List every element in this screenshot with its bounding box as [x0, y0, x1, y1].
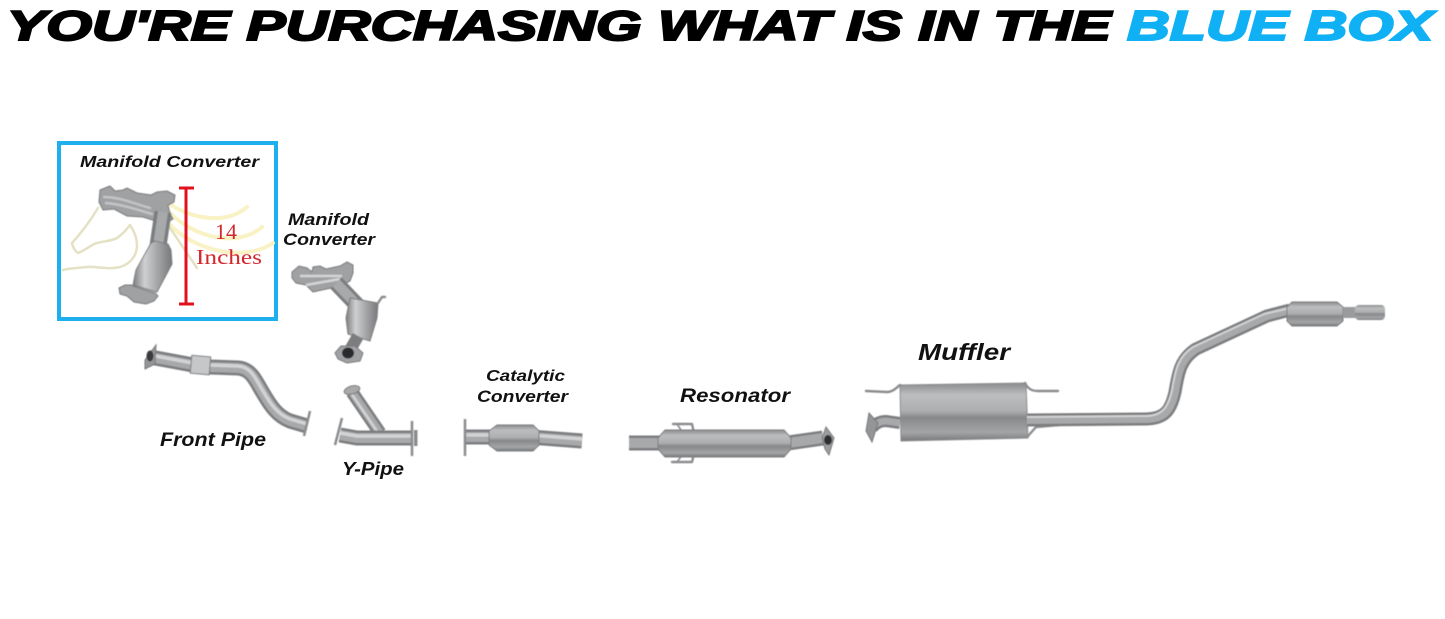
part: y-pipe [335, 384, 418, 456]
label: front pipe: Front Pipe [160, 429, 266, 451]
label: catalytic converter: Converter [477, 388, 570, 406]
dimension label [196, 219, 262, 269]
label: muffler: Muffler [918, 339, 1012, 365]
part: front pipe [145, 345, 310, 436]
label: y-pipe: Y-Pipe [342, 458, 404, 479]
label: manifold converter: Manifold [288, 211, 370, 229]
dimension label: 14 [215, 219, 237, 244]
label: manifold converter [283, 211, 377, 249]
part: muffler [866, 383, 1058, 442]
part: tailpipe with end resonator [1027, 302, 1385, 436]
part: catalytic converter [465, 419, 582, 456]
title [7, 2, 1437, 49]
manifold converter part in box [99, 186, 175, 304]
part: resonator [629, 424, 834, 462]
label: resonator: Resonator [680, 385, 792, 407]
label: catalytic converter: Catalytic [486, 368, 565, 385]
dimension label: Inches [196, 245, 262, 269]
part: manifold converter [292, 262, 385, 363]
heading: manifold converter in box: Manifold Converter [80, 154, 260, 171]
panel: blue box with manifold converter [59, 143, 276, 319]
label: catalytic converter [477, 368, 570, 406]
dimension bar [179, 188, 194, 304]
label: manifold converter: Converter [283, 231, 377, 249]
title: BLUE BOX [1127, 2, 1437, 49]
horse logo watermark [63, 203, 273, 270]
title: YOU'RE PURCHASING WHAT IS IN THE [7, 2, 1114, 49]
